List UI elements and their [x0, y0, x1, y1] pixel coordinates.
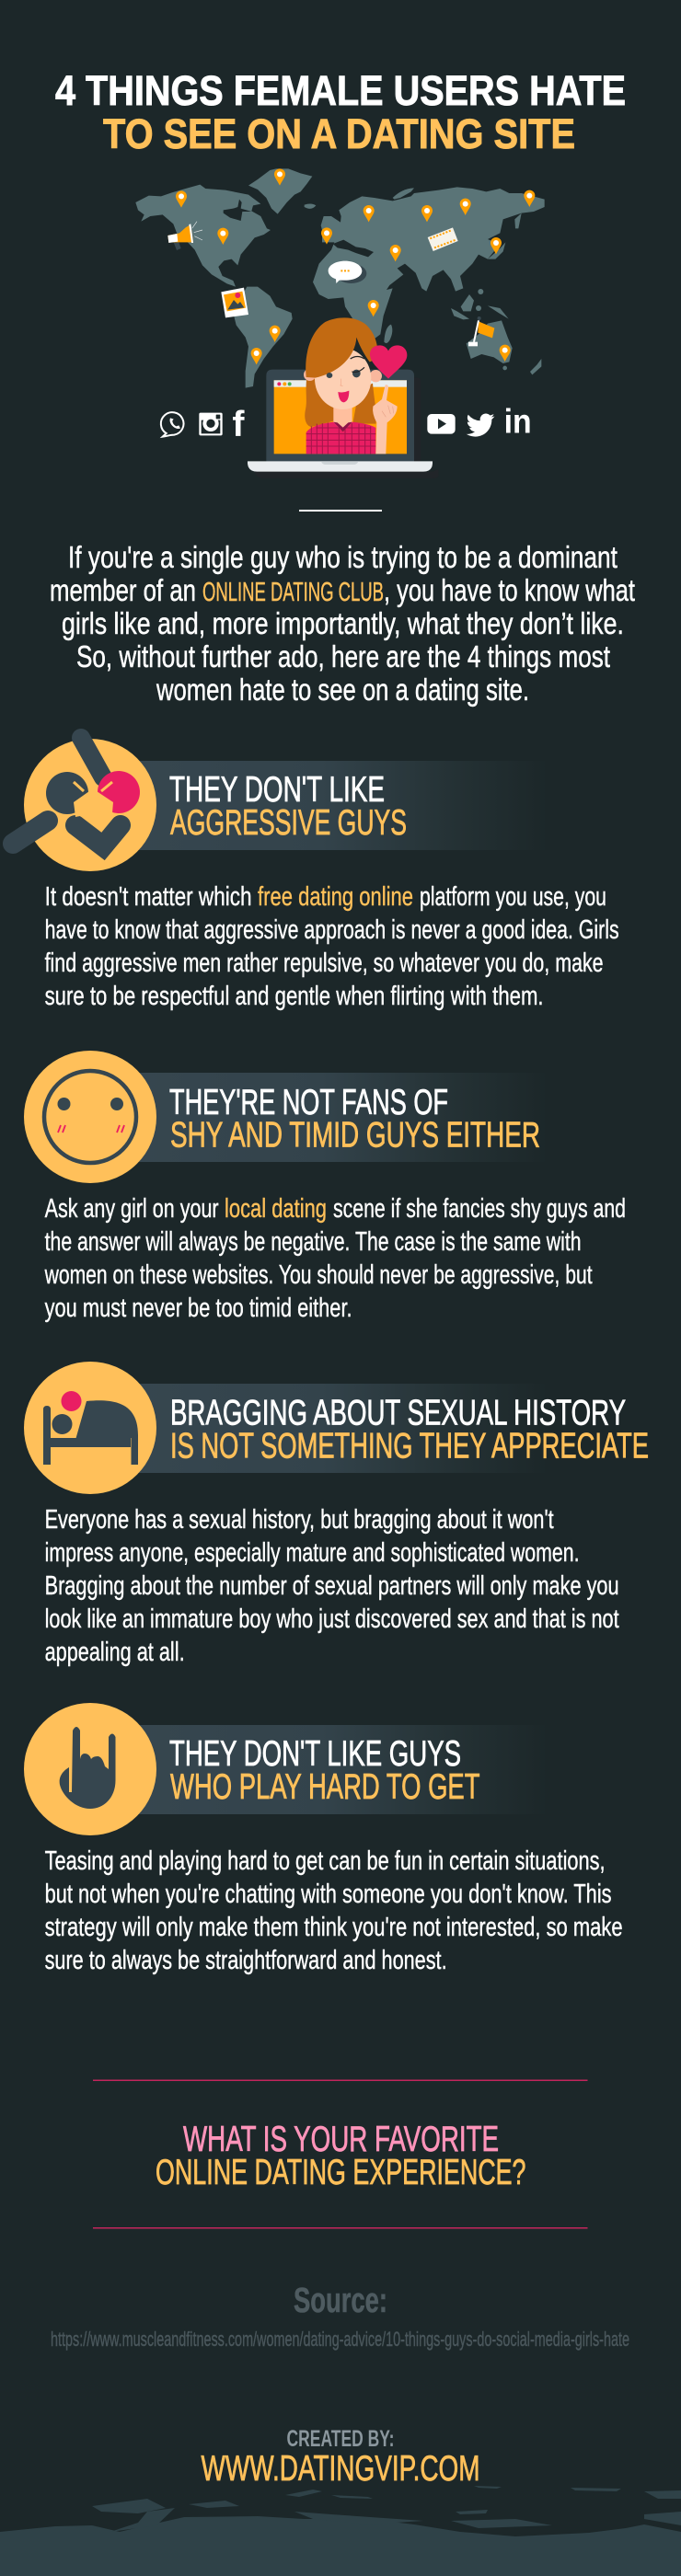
body text: platform you use, you — [420, 882, 606, 912]
woman — [304, 317, 407, 454]
heading — [169, 1734, 480, 1807]
banner — [138, 1384, 548, 1473]
body text — [45, 882, 619, 1011]
body text: appealing at all. — [45, 1638, 185, 1667]
world map — [135, 168, 545, 388]
banner — [138, 1725, 548, 1814]
icon: bed — [24, 1362, 156, 1494]
icon: photo — [221, 288, 248, 317]
social icons right — [427, 403, 532, 441]
intro text: member of an — [50, 573, 196, 607]
bottom texture — [0, 2486, 681, 2576]
intro text — [50, 540, 635, 707]
icon: speech bubble — [329, 261, 366, 283]
heading — [170, 1393, 649, 1466]
source — [51, 2282, 629, 2351]
heading: THEY DON'T LIKE — [169, 770, 385, 810]
section 1: aggressive guys — [13, 738, 619, 1011]
hand — [373, 385, 398, 454]
icon: whatsapp — [161, 412, 184, 437]
credit: CREATED BY: — [287, 2426, 394, 2452]
closing question: WHAT IS YOUR FAVORITE — [183, 2120, 499, 2159]
banner — [138, 1073, 548, 1162]
body text: sure to always be straightforward and honest. — [45, 1946, 447, 1975]
body text: free dating online — [258, 882, 413, 912]
icon: film ticket — [428, 227, 458, 251]
icon: youtube — [427, 414, 456, 434]
credit: WWW.DATINGVIP.COM — [201, 2449, 480, 2489]
icon: blushing face — [24, 1051, 156, 1183]
credit — [201, 2426, 480, 2489]
body text: Ask any girl on your — [45, 1194, 219, 1224]
closing question: ONLINE DATING EXPERIENCE? — [156, 2153, 526, 2192]
icon: rock hand — [24, 1703, 156, 1835]
heading: THEY'RE NOT FANS OF — [169, 1083, 448, 1122]
section 4: play hard to get — [24, 1703, 623, 1975]
body text: sure to be respectful and gentle when flirting with them. — [45, 982, 544, 1011]
body text: It doesn't matter which — [45, 882, 252, 912]
heading: THEY DON'T LIKE GUYS — [169, 1734, 461, 1774]
social icons left — [161, 404, 245, 444]
body text: local dating — [225, 1194, 327, 1224]
icon: megaphone — [167, 222, 202, 250]
icon: linkedin: in — [504, 403, 532, 441]
heading — [169, 770, 407, 843]
intro text: women hate to see on a dating site. — [156, 673, 529, 707]
heading — [169, 1083, 540, 1156]
heading: AGGRESSIVE GUYS — [170, 803, 407, 843]
banner — [138, 761, 548, 850]
closing question — [156, 2120, 526, 2192]
laptop — [248, 370, 439, 478]
heading: WHO PLAY HARD TO GET — [170, 1767, 480, 1807]
icon: instagram — [199, 413, 223, 435]
title — [55, 67, 626, 157]
map pins — [176, 168, 535, 364]
heart — [370, 345, 407, 379]
body text — [45, 1505, 619, 1667]
section 3: bragging about sexual history — [24, 1362, 649, 1667]
body text — [45, 1846, 623, 1975]
source: Source: — [294, 2282, 387, 2320]
intro text: ONLINE DATING CLUB — [202, 578, 384, 607]
icon: flag — [468, 316, 494, 346]
icon: facebook: f — [232, 404, 245, 444]
icon: twitter — [467, 414, 494, 437]
body text: you must never be too timid either. — [45, 1294, 352, 1323]
icon: angry faces — [13, 738, 156, 871]
section 2: shy and timid guys — [24, 1051, 626, 1323]
heading: SHY AND TIMID GUYS EITHER — [170, 1115, 540, 1156]
body text — [44, 1194, 626, 1323]
title: TO SEE ON A DATING SITE — [103, 110, 575, 157]
hero illustration — [135, 168, 545, 478]
